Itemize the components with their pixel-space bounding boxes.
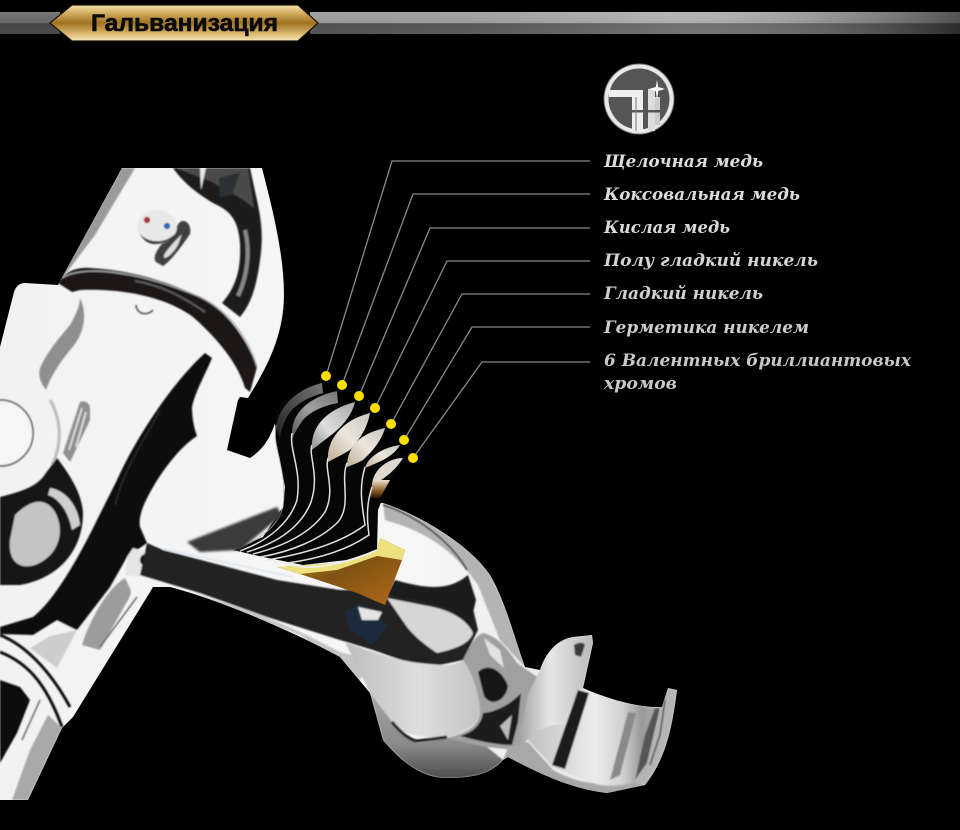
small joint bbox=[125, 548, 146, 577]
bracket arm bbox=[515, 635, 593, 750]
layer labels: Гладкий никель bbox=[603, 284, 763, 304]
bracket cup bbox=[528, 688, 660, 786]
black layered section bbox=[233, 383, 403, 565]
gold base layer bbox=[277, 538, 405, 605]
header bar bbox=[0, 12, 960, 34]
upper body dark reflection bbox=[173, 168, 262, 317]
spout lower body bbox=[345, 642, 480, 738]
handle crescent reflection bbox=[39, 298, 84, 390]
spout top surface bbox=[383, 503, 525, 667]
layer lines bbox=[233, 425, 377, 567]
leader lines bbox=[326, 161, 590, 458]
faucet silhouette bbox=[0, 168, 677, 800]
small notch under ring bbox=[136, 305, 153, 314]
layer labels: Кислая медь bbox=[603, 218, 730, 238]
layer labels bbox=[603, 152, 912, 394]
plating layers cutaway bbox=[233, 383, 405, 605]
leaf layers bbox=[276, 383, 323, 437]
knob bbox=[137, 210, 190, 266]
base underside bbox=[370, 693, 503, 778]
faucet photo bbox=[0, 168, 677, 800]
layer labels: 6 Валентных бриллиантовых bbox=[604, 351, 912, 371]
layer labels: Коксовальная медь bbox=[603, 185, 800, 205]
bracket neck bbox=[447, 633, 537, 750]
ring band bbox=[58, 268, 257, 392]
dark diagonal band bbox=[0, 353, 212, 635]
lower pipe reflections bbox=[0, 635, 70, 727]
reflected figure bbox=[345, 604, 388, 645]
layer labels: Полу гладкий никель bbox=[603, 251, 818, 271]
layer labels: Щелочная медь bbox=[603, 152, 763, 172]
marker dots bbox=[321, 371, 418, 463]
heading badge: Гальванизация bbox=[91, 10, 278, 37]
layer labels: хромов bbox=[603, 374, 677, 394]
bracket rim bbox=[503, 742, 647, 795]
upper body edge reflection bbox=[58, 168, 135, 283]
spout underside dark bbox=[140, 543, 478, 665]
large handle disc bbox=[0, 400, 33, 466]
spout light patch bbox=[387, 598, 473, 653]
icon: chrome logo bbox=[604, 64, 674, 134]
spout shadow below section bbox=[187, 507, 282, 552]
handle hub bbox=[0, 458, 83, 585]
layer labels: Герметика никелем bbox=[603, 318, 809, 338]
right side shading bbox=[248, 222, 284, 397]
slotted lever bbox=[63, 401, 90, 462]
faucet shading and reflections bbox=[0, 168, 677, 800]
lower stem highlight bbox=[82, 578, 131, 650]
heading badge bbox=[50, 5, 318, 41]
